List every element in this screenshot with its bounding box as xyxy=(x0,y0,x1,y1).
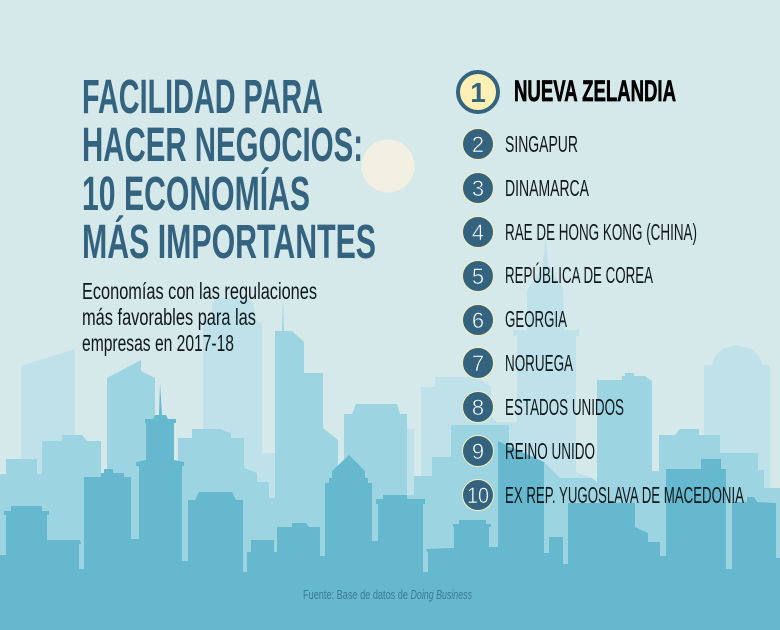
subtitle: más favorables para las xyxy=(82,304,256,330)
ranking item 4: RAE de Hong Kong xyxy=(462,216,697,248)
ranking item 4: RAE de Hong Kong: 4 xyxy=(472,220,484,245)
ranking item 6: Georgia xyxy=(462,304,567,336)
title: 10 ECONOMÍAS xyxy=(82,167,310,221)
skyline: near buildings xyxy=(0,383,780,630)
ranking item 10: Ex Rep. Yugoslava de Macedonia: 10 xyxy=(467,483,489,508)
ranking item 2: Singapur: 2 xyxy=(472,132,484,157)
title: HACER NEGOCIOS: xyxy=(82,119,363,172)
ranking item 5: República de Corea: 5 xyxy=(472,264,484,289)
ranking item 7: Noruega: 7 xyxy=(472,351,484,376)
ranking item 1: Nueva Zelandia: 1 xyxy=(470,77,486,108)
ranking item 9: Reino Unido: 9 xyxy=(472,439,484,464)
ranking item 8: Estados Unidos: ESTADOS UNIDOS xyxy=(505,394,624,420)
ranking item 2: Singapur xyxy=(462,128,578,160)
source note: Fuente: Base de datos de xyxy=(303,587,408,602)
ranking item 8: Estados Unidos: 8 xyxy=(472,395,484,420)
skyline: middle buildings xyxy=(0,297,780,630)
title xyxy=(82,71,376,269)
ranking item 8: Estados Unidos xyxy=(462,392,624,422)
ranking item 10: Ex Rep. Yugoslava de Macedonia xyxy=(462,480,744,510)
subtitle xyxy=(82,278,317,356)
ranking item 1: Nueva Zelandia xyxy=(458,72,676,112)
ranking item 1: Nueva Zelandia: NUEVA ZELANDIA xyxy=(514,75,676,108)
subtitle: Economías con las regulaciones xyxy=(82,278,317,304)
skyline: far buildings xyxy=(21,237,770,520)
ranking item 7: Noruega: NORUEGA xyxy=(505,350,573,376)
ranking item 5: República de Corea: REPÚBLICA DE COREA xyxy=(505,262,653,288)
ranking item 3: Dinamarca: DINAMARCA xyxy=(505,175,589,201)
source note: Doing Business xyxy=(410,587,472,602)
ranking item 3: Dinamarca: 3 xyxy=(472,176,484,201)
title: FACILIDAD PARA xyxy=(82,71,323,124)
ranking item 2: Singapur: SINGAPUR xyxy=(505,131,578,157)
subtitle: empresas en 2017-18 xyxy=(82,330,234,356)
icon: sun xyxy=(362,140,414,192)
title: MÁS IMPORTANTES xyxy=(82,215,376,269)
ranking item 3: Dinamarca xyxy=(462,172,589,204)
ranking item 5: República de Corea xyxy=(462,260,653,292)
ranking item 6: Georgia: 6 xyxy=(472,308,484,333)
ranking item 9: Reino Unido xyxy=(462,436,595,466)
ranking item 9: Reino Unido: REINO UNIDO xyxy=(505,438,595,464)
ranking item 7: Noruega xyxy=(462,348,573,378)
ranking item 6: Georgia: GEORGIA xyxy=(505,306,567,332)
